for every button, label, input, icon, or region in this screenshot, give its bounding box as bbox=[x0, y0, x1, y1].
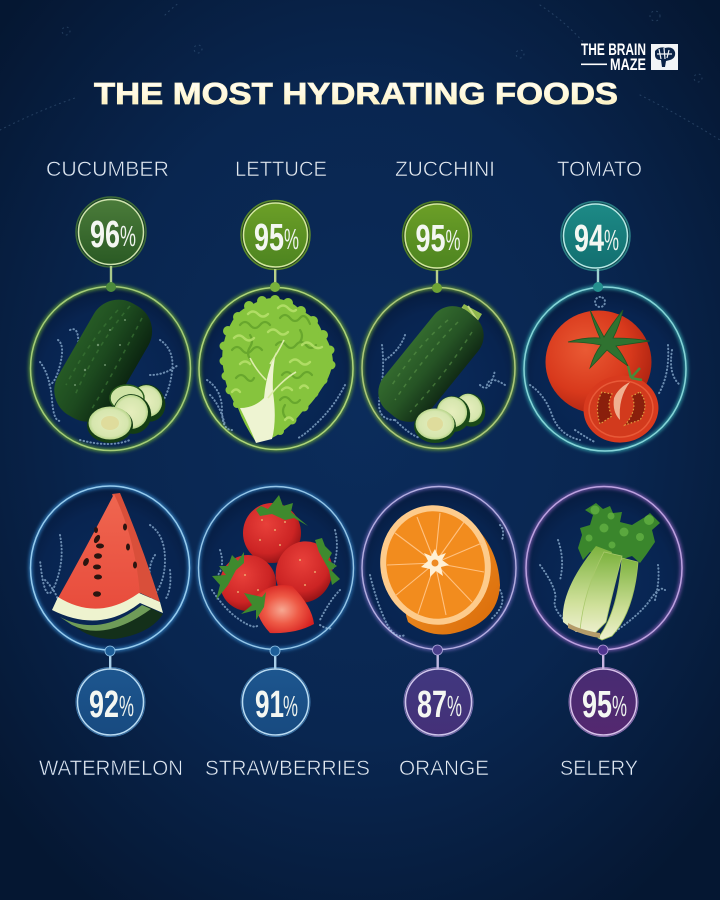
badge: 95%: % bbox=[284, 224, 299, 256]
badge: 95% bbox=[402, 202, 472, 270]
water splash bbox=[40, 525, 170, 600]
panel: cucumber bbox=[30, 158, 190, 450]
label: tomato: TOMATO bbox=[557, 158, 642, 181]
badge: 95%: % bbox=[612, 691, 627, 723]
connector bbox=[432, 645, 442, 669]
badge: 95%: % bbox=[446, 225, 460, 257]
panel: strawberries bbox=[198, 486, 370, 780]
badge: 94%: % bbox=[604, 225, 619, 257]
circle frame bbox=[526, 486, 682, 650]
water splash bbox=[40, 329, 178, 444]
badge: 94%: 94 bbox=[574, 218, 604, 260]
water splash bbox=[530, 297, 680, 442]
icon: cucumber bbox=[44, 289, 171, 443]
badge: 87%: 87 bbox=[417, 684, 447, 726]
badge: 96%: % bbox=[120, 221, 136, 253]
water splash bbox=[212, 530, 340, 629]
badge: 95% bbox=[569, 668, 638, 736]
badge: 96% bbox=[76, 197, 146, 267]
title: THE MOST HYDRATING FOODS bbox=[94, 77, 618, 111]
panel: orange bbox=[362, 486, 516, 780]
badge: 92%: % bbox=[119, 691, 134, 723]
connector bbox=[106, 266, 116, 292]
circle frame bbox=[30, 286, 190, 450]
label: strawberries: STRAWBERRIES bbox=[205, 757, 370, 780]
badge: 96%: 96 bbox=[90, 214, 120, 256]
label: cucumber: CUCUMBER bbox=[46, 158, 169, 181]
connector bbox=[593, 269, 603, 292]
circle frame bbox=[524, 287, 686, 451]
label: watermelon: WATERMELON bbox=[39, 757, 183, 780]
icon: zucchini bbox=[369, 296, 493, 443]
badge: 95%: 95 bbox=[254, 217, 284, 259]
label: zucchini: ZUCCHINI bbox=[395, 158, 495, 181]
water droplet texture bbox=[0, 2, 720, 140]
badge: 95%: 95 bbox=[416, 218, 446, 260]
panel: zucchini bbox=[362, 158, 515, 448]
icon: watermelon bbox=[52, 493, 163, 639]
label: selery: SELERY bbox=[560, 757, 638, 780]
badge: 87% bbox=[404, 668, 473, 736]
connector bbox=[432, 270, 442, 293]
badge: 91%: % bbox=[283, 691, 298, 723]
badge: 94% bbox=[561, 202, 630, 270]
brand logo bbox=[581, 41, 678, 74]
icon: tomato bbox=[546, 310, 663, 447]
circle frame bbox=[30, 486, 190, 650]
circle frame bbox=[199, 288, 353, 450]
icon: orange bbox=[368, 493, 503, 637]
label: lettuce: LETTUCE bbox=[235, 158, 327, 181]
connector bbox=[270, 269, 280, 292]
badge: 92%: 92 bbox=[89, 684, 119, 726]
circle frame bbox=[198, 486, 354, 650]
icon: strawberries bbox=[212, 495, 341, 633]
badge: 95%: 95 bbox=[582, 684, 612, 726]
badge: 87%: % bbox=[447, 691, 462, 723]
panel: selery bbox=[526, 486, 682, 780]
brand logo: THE BRAIN bbox=[581, 41, 646, 59]
icon: selery bbox=[563, 503, 660, 640]
icon: brain bbox=[651, 44, 678, 70]
badge: 91% bbox=[241, 668, 310, 736]
badge: 95% bbox=[241, 200, 310, 270]
badge: 92% bbox=[76, 668, 145, 736]
water splash bbox=[540, 540, 665, 635]
panel: tomato bbox=[524, 158, 686, 451]
connector bbox=[598, 645, 608, 669]
panel: lettuce bbox=[199, 158, 353, 450]
panel: watermelon bbox=[30, 486, 190, 780]
icon: lettuce bbox=[220, 295, 336, 443]
circle frame bbox=[362, 288, 515, 448]
water splash bbox=[370, 525, 503, 636]
connector bbox=[105, 646, 115, 669]
water splash bbox=[207, 380, 345, 438]
circle frame bbox=[362, 486, 516, 650]
water splash bbox=[379, 335, 505, 438]
brand logo: MAZE bbox=[610, 56, 646, 74]
label: orange: ORANGE bbox=[399, 757, 489, 780]
badge: 91%: 91 bbox=[255, 684, 284, 726]
connector bbox=[270, 646, 280, 669]
